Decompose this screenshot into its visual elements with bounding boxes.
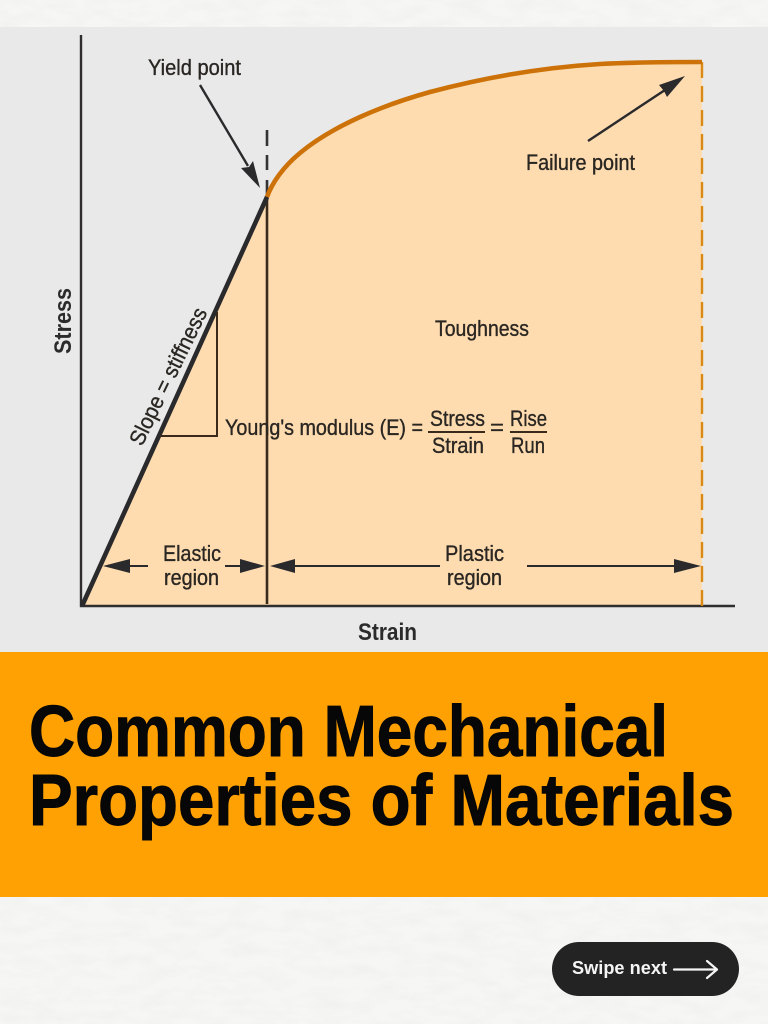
plastic region label and arrows — [270, 541, 701, 590]
swipe next button: Swipe next — [572, 958, 667, 978]
title: Common Mechanical — [29, 692, 668, 772]
slope label: Slope = stiffness — [124, 303, 212, 449]
panel: stress-strain chart — [0, 27, 768, 653]
elastic region label and arrows: Elastic — [163, 541, 221, 566]
toughness shaded area — [82, 62, 702, 606]
elastic region label and arrows: region — [164, 565, 219, 590]
icon: arrow — [674, 961, 717, 978]
elastic line — [82, 197, 267, 606]
plastic curve — [267, 62, 702, 197]
young's modulus formula: Strain — [432, 433, 484, 458]
young's modulus formula — [225, 406, 547, 458]
strain axis label: Strain — [358, 619, 417, 646]
yield point vertical line — [266, 130, 268, 604]
stress axis label: Stress — [49, 288, 76, 354]
slope triangle — [160, 312, 217, 436]
failure point label and arrow — [526, 76, 685, 175]
failure point label and arrow: Failure point — [526, 150, 635, 175]
elastic region label and arrows — [103, 541, 265, 590]
plastic region label and arrows: Plastic — [445, 541, 504, 566]
stress axis — [81, 35, 735, 606]
young's modulus formula: Stress — [430, 406, 485, 431]
toughness label: Toughness — [435, 316, 529, 341]
young's modulus formula: Young's modulus (E) = — [225, 415, 423, 440]
failure point dashed line — [701, 62, 703, 606]
title — [29, 692, 734, 841]
young's modulus formula: Rise — [510, 406, 547, 431]
swipe next button — [552, 942, 739, 996]
yield point label and arrow — [148, 55, 260, 188]
young's modulus formula: = — [490, 415, 504, 440]
young's modulus formula: Run — [511, 433, 545, 458]
plastic region label and arrows: region — [447, 565, 502, 590]
yield point label and arrow: Yield point — [148, 55, 241, 80]
title band — [0, 652, 768, 897]
